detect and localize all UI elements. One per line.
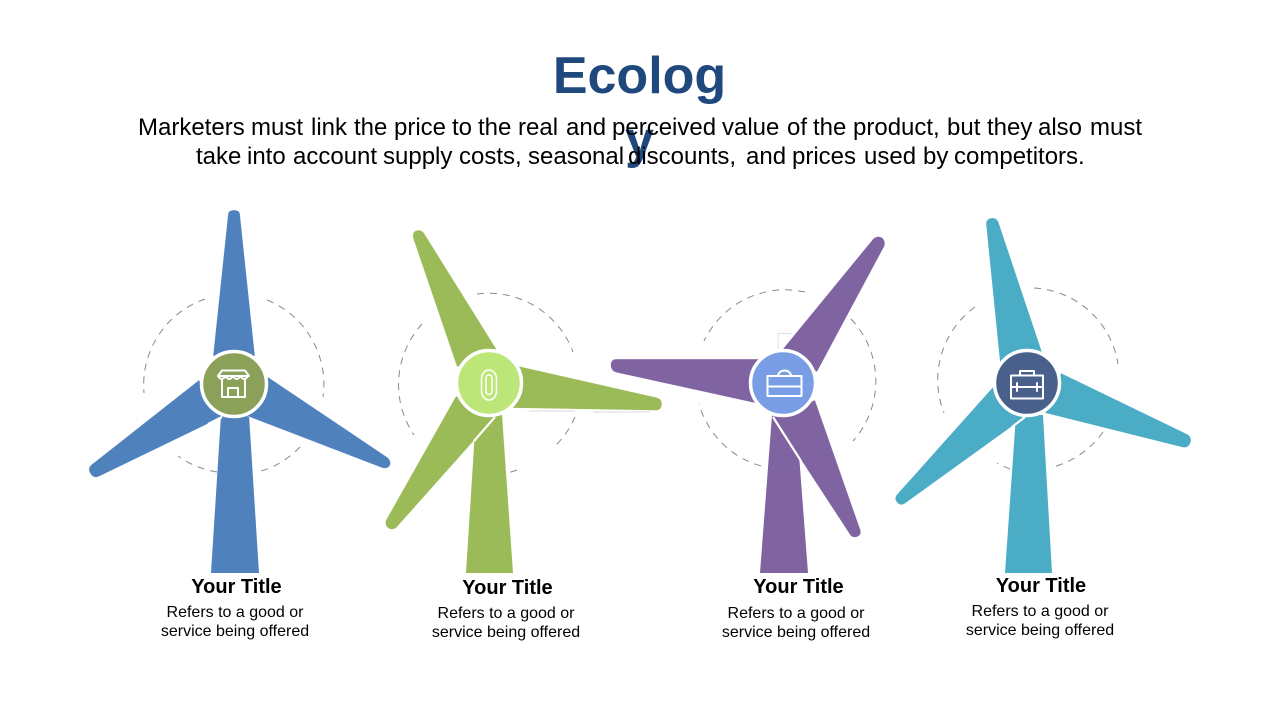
- dashed ring 3: [699, 290, 876, 466]
- intro text: costs,: [459, 143, 522, 170]
- blade edge 2: [474, 417, 495, 441]
- hub 1: [202, 352, 266, 416]
- intro text: also: [1038, 114, 1082, 141]
- intro text: the: [354, 114, 387, 141]
- dashed ring 4: [938, 288, 1118, 469]
- tower 2: [466, 415, 513, 573]
- icon: briefcase: [1011, 371, 1043, 398]
- intro text: account: [293, 143, 377, 170]
- intro text: must: [1090, 114, 1142, 141]
- intro text: and: [566, 114, 606, 141]
- caption 3: [722, 576, 870, 641]
- intro text: used: [864, 143, 916, 170]
- dashed ring 2: [399, 293, 575, 473]
- intro text: [138, 114, 1142, 170]
- turbine 3: purple: [610, 237, 885, 573]
- blades 4: [895, 218, 1191, 505]
- intro text: supply: [383, 143, 452, 170]
- intro text: discounts,: [628, 143, 736, 170]
- blade edge 3: [773, 417, 801, 461]
- caption 1: [161, 576, 309, 640]
- faint outline 2: [529, 411, 650, 412]
- caption 4: service being offered: [966, 622, 1114, 639]
- caption 1: Your Title: [191, 576, 282, 598]
- intro text: but: [947, 114, 981, 141]
- tower 3: [760, 415, 808, 573]
- caption 3: service being offered: [722, 624, 870, 641]
- caption 2: Your Title: [462, 577, 553, 599]
- intro text: prices: [792, 143, 856, 170]
- intro text: of: [787, 114, 807, 141]
- intro text: competitors.: [954, 143, 1085, 170]
- hub 3: [750, 350, 816, 416]
- intro text: they: [987, 114, 1032, 141]
- caption 2: service being offered: [432, 624, 580, 641]
- intro text: real: [518, 114, 558, 141]
- blades 1: [89, 210, 391, 477]
- intro text: Marketers: [138, 114, 245, 141]
- intro text: by: [923, 143, 948, 170]
- intro text: perceived: [612, 114, 716, 141]
- title: Ecolog: [553, 47, 726, 105]
- faint outline 3: [778, 334, 792, 350]
- blade edge 1: [208, 417, 222, 424]
- tower 1: [211, 415, 259, 573]
- intro text: take: [196, 143, 241, 170]
- tower 4: [1005, 415, 1052, 573]
- caption 2: [432, 577, 580, 641]
- turbine 4: teal: [895, 218, 1191, 573]
- intro text: value: [722, 114, 779, 141]
- intro text: into: [247, 143, 286, 170]
- caption 1: service being offered: [161, 623, 309, 640]
- caption 4: Your Title: [996, 575, 1086, 597]
- caption 3: Refers to a good or: [728, 605, 865, 622]
- icon: paperclip: [482, 370, 496, 400]
- hub 4: [994, 350, 1060, 416]
- intro text: product,: [853, 114, 940, 141]
- caption 4: Refers to a good or: [972, 603, 1109, 620]
- icon: suitcase: [768, 371, 802, 396]
- intro text: the: [813, 114, 846, 141]
- intro text: to: [452, 114, 472, 141]
- intro text: link: [311, 114, 348, 141]
- intro text: must: [251, 114, 303, 141]
- blades 3: [610, 237, 885, 537]
- blade edge 4: [1012, 417, 1025, 427]
- caption 2: Refers to a good or: [438, 605, 575, 622]
- icon: storefront: [218, 370, 249, 397]
- turbine 1: blue: [89, 210, 391, 573]
- turbine 2: green: [385, 230, 662, 573]
- caption 1: Refers to a good or: [167, 604, 304, 621]
- dashed ring 1: [144, 299, 324, 472]
- caption 4: [966, 575, 1114, 639]
- intro text: price: [394, 114, 446, 141]
- intro text: and: [746, 143, 786, 170]
- caption 3: Your Title: [753, 576, 844, 598]
- title: [553, 47, 726, 169]
- hub 2: [456, 350, 522, 416]
- intro text: seasonal: [528, 143, 624, 170]
- title: y: [625, 111, 654, 169]
- blades 2: [385, 230, 662, 529]
- intro text: the: [478, 114, 511, 141]
